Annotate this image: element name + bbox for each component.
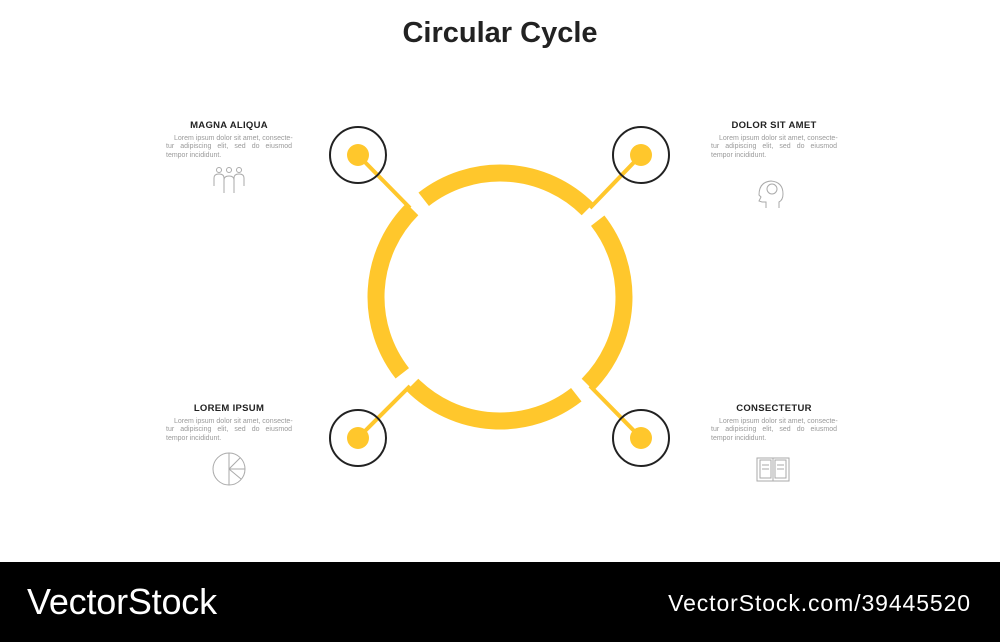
node dots bbox=[347, 144, 652, 449]
text: dolor sit amet: tur adipiscing elit, sed do eiusmod bbox=[711, 143, 837, 150]
ring segments bbox=[376, 173, 624, 421]
text: dolor sit amet: tempor incididunt. bbox=[711, 152, 766, 159]
text: magna aliqua: tur adipiscing elit, sed do eiusmod bbox=[166, 143, 292, 150]
text: lorem ipsum: tempor incididunt. bbox=[166, 435, 221, 442]
footer url: VectorStock.com/39445520 bbox=[668, 590, 971, 616]
text: consectetur: tempor incididunt. bbox=[711, 435, 766, 442]
footer logo: VectorStock bbox=[27, 581, 217, 622]
heading: consectetur: CONSECTETUR bbox=[736, 403, 812, 414]
icon: book bbox=[757, 458, 789, 481]
title: Circular Cycle bbox=[402, 17, 598, 49]
text: consectetur bbox=[711, 418, 838, 442]
text: dolor sit amet: Lorem ipsum dolor sit amet, consecte- bbox=[719, 135, 838, 142]
icon: pie chart bbox=[213, 453, 245, 485]
footer bar bbox=[0, 562, 1000, 642]
connector lines bbox=[358, 155, 641, 438]
heading: dolor sit amet: DOLOR SIT AMET bbox=[731, 120, 817, 131]
heading: lorem ipsum: LOREM IPSUM bbox=[194, 403, 264, 414]
icon: head bbox=[759, 181, 783, 208]
text: lorem ipsum bbox=[166, 418, 293, 442]
text: consectetur: tur adipiscing elit, sed do eiusmod bbox=[711, 426, 837, 433]
text: lorem ipsum: tur adipiscing elit, sed do eiusmod bbox=[166, 426, 292, 433]
icon: people bbox=[214, 168, 244, 193]
text: magna aliqua bbox=[166, 134, 293, 159]
text: magna aliqua: tempor incididunt. bbox=[166, 152, 221, 159]
text: consectetur: Lorem ipsum dolor sit amet, consecte- bbox=[719, 418, 838, 425]
text: lorem ipsum: Lorem ipsum dolor sit amet, consecte- bbox=[174, 418, 293, 425]
heading: magna aliqua: MAGNA ALIQUA bbox=[190, 120, 268, 131]
node circles bbox=[330, 127, 669, 466]
text: dolor sit amet bbox=[711, 134, 838, 159]
text: magna aliqua: Lorem ipsum dolor sit amet, consecte- bbox=[174, 135, 293, 142]
